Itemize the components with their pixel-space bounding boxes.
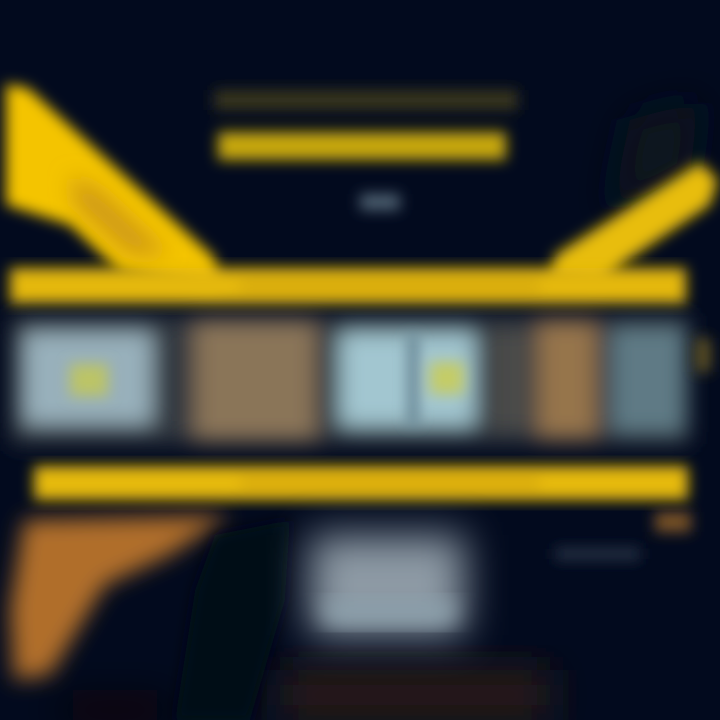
bottom centre photo: [310, 535, 465, 635]
lower yellow banner: [34, 466, 688, 500]
panel: lower wood floor glow: [60, 670, 550, 720]
panel: background strip: [10, 316, 690, 444]
panel: photo 6: [612, 328, 684, 432]
panel: photo 5: [538, 322, 596, 437]
panel: photo 4: [492, 330, 530, 430]
inner shading on left wing: [70, 175, 170, 255]
panel: photo 3: [340, 332, 475, 426]
panel: photo 2: [195, 322, 315, 440]
right yellow arrow wing: [550, 162, 718, 285]
right small text block: [555, 512, 691, 560]
left orange shape: [10, 515, 230, 680]
title: [214, 90, 518, 210]
photo highlights: [70, 335, 711, 425]
left yellow arrow wing: [6, 84, 218, 290]
dark silhouette: [175, 520, 290, 720]
top yellow banner: [10, 268, 686, 304]
panel: dark upper right structure: [610, 100, 700, 215]
image strip panels: [10, 316, 690, 444]
bottom centre photo highlight: [325, 600, 455, 625]
panel: photo 1: [24, 332, 152, 424]
